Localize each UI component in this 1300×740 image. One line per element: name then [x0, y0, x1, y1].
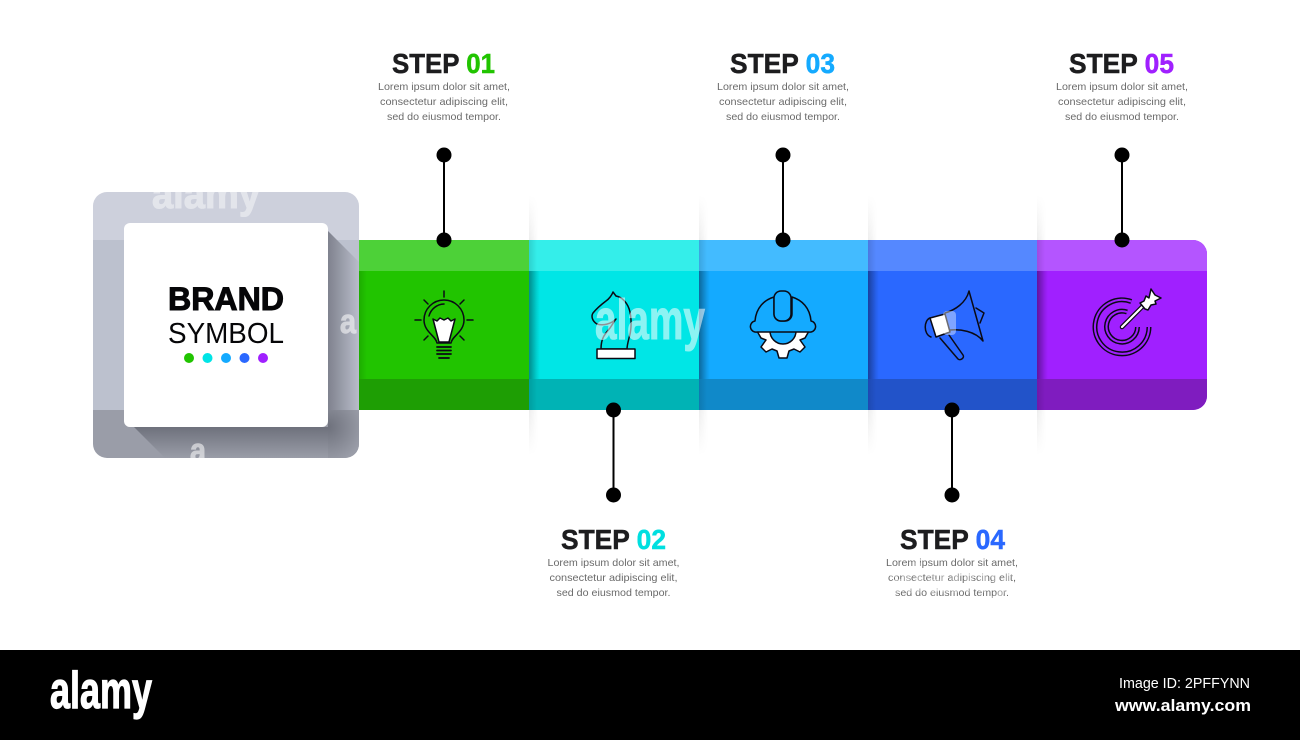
text: step 5: sed do eiusmod tempor. [1065, 111, 1179, 123]
watermark: over megaphone [943, 311, 956, 335]
text: step 4: STEP 04 [900, 524, 1005, 555]
text: step 3: sed do eiusmod tempor. [726, 111, 840, 123]
text: step 1 [378, 48, 510, 123]
panel: segment 2 cyan [529, 240, 699, 410]
panel: segment 1 green [359, 240, 529, 410]
text: step 2: Lorem ipsum dolor sit amet, [548, 557, 680, 569]
text: step 1: consectetur adipiscing elit, [380, 96, 508, 108]
brand colour dots [184, 353, 268, 363]
connector: step 4 [944, 402, 960, 502]
brand card [124, 223, 328, 427]
text: step 2: STEP 02 [561, 524, 666, 555]
panel: brand key [93, 192, 359, 458]
watermark: over chess knight: alamy [595, 288, 705, 352]
text: step 4: consectetur adipiscing elit, [888, 572, 1016, 584]
text: step 3: Lorem ipsum dolor sit amet, [717, 81, 849, 93]
icon: target with arrow [1095, 289, 1161, 354]
text: step 2 [548, 524, 680, 599]
panel: segment 5 purple [1037, 240, 1207, 410]
text: step 2: sed do eiusmod tempor. [556, 587, 670, 599]
text: step 4: Lorem ipsum dolor sit amet, [886, 557, 1018, 569]
text: step 1: Lorem ipsum dolor sit amet, [378, 81, 510, 93]
connector: step 2 [606, 402, 621, 502]
watermark: over step 4 text: alamy [888, 557, 1014, 601]
panel: brand key: alamy [152, 173, 261, 217]
icon: light bulb [415, 291, 473, 358]
text: step 5: STEP 05 [1069, 48, 1174, 79]
footer image id: Image ID: 2PFFYNN [1119, 675, 1250, 692]
connector: step 1 [436, 148, 452, 248]
text: step 1: STEP 01 [392, 48, 495, 79]
text: step 3: STEP 03 [730, 48, 835, 79]
text: step 5 [1056, 48, 1188, 123]
text: step 4: sed do eiusmod tempor. [895, 587, 1009, 599]
icon: hard hat with gear [750, 291, 816, 358]
footer logo: alamy [50, 662, 152, 720]
footer band [0, 650, 1300, 740]
panel: segment 4 royal blue [868, 240, 1037, 410]
panel: brand key: a [340, 303, 357, 341]
text: step 5: Lorem ipsum dolor sit amet, [1056, 81, 1188, 93]
soft shadows beside segments [529, 217, 1042, 433]
connector: step 3 [776, 148, 790, 248]
panel: brand key: a [190, 432, 207, 470]
text: step 2: consectetur adipiscing elit, [550, 572, 678, 584]
text: step 3: consectetur adipiscing elit, [719, 96, 847, 108]
connector: step 5 [1114, 148, 1130, 248]
text: step 4 [886, 524, 1018, 599]
footer website: www.alamy.com [1114, 696, 1251, 715]
brand name: BRAND [168, 281, 284, 317]
text: step 1: sed do eiusmod tempor. [387, 111, 501, 123]
brand subtitle: SYMBOL [168, 318, 284, 350]
icon: chess knight [592, 292, 635, 358]
icon: megaphone [925, 291, 984, 360]
text: step 3 [717, 48, 849, 123]
panel: segment 3 blue [699, 240, 868, 410]
text: step 5: consectetur adipiscing elit, [1058, 96, 1186, 108]
